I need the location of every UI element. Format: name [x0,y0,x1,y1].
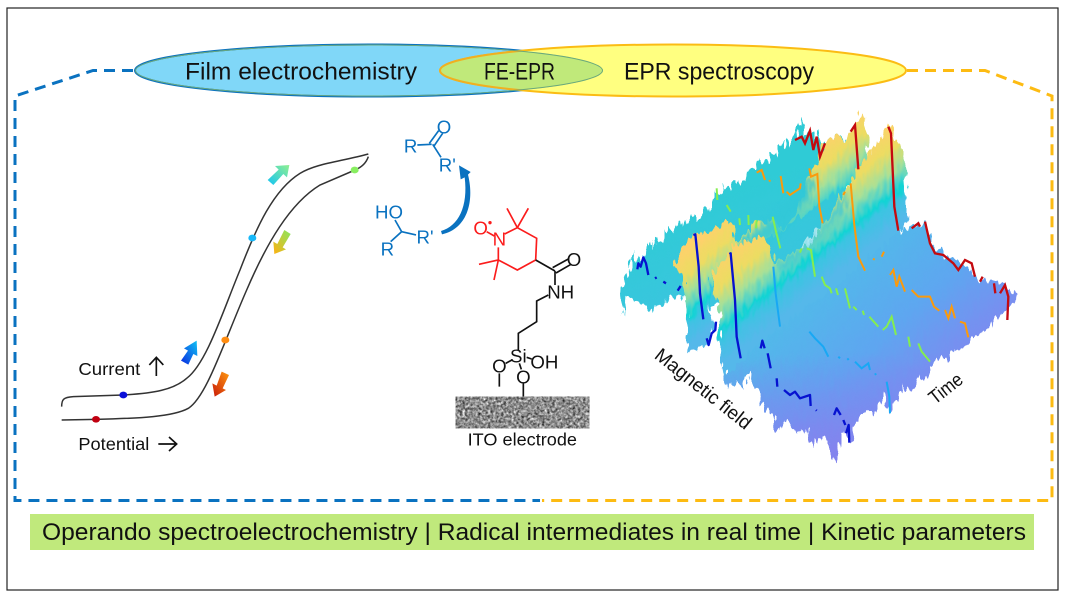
ellipse: film electrochemistry [135,44,603,96]
ketone product: R' [439,154,456,175]
alcohol substrate: R' [416,227,434,248]
trace: red [795,125,1008,320]
front wall teal section [775,193,848,270]
ridge wall: front [712,125,907,378]
TEMPO radical [473,208,537,280]
back plateau [622,120,857,315]
linker: Si [510,346,527,367]
icon: up arrow [149,357,163,376]
axis label: current: Current [78,359,141,379]
arrow: blue up [181,341,197,365]
TEMPO radical: N [493,229,506,250]
banner text: Operando spectroelectrochemistry | Radical intermediates in real time | Kinetic parameters [42,519,1026,546]
summary banner [30,514,1034,550]
curve: forward scan [62,154,368,407]
marker points [92,167,359,423]
axis label: magnetic field: Magnetic field [650,345,755,434]
label: ITO electrode: ITO electrode [468,429,577,449]
linker: OH [530,351,558,372]
arrow: cyan up [268,165,289,185]
venn diagram header [135,44,906,96]
voltammogram chart [62,154,368,454]
front surface shade [723,223,1018,463]
ridge wall: rear [673,113,868,353]
TEMPO radical: O [473,218,488,239]
arrow: orange down [212,372,229,397]
3D EPR surface plot [622,113,1018,463]
linker [492,249,581,397]
ketone product: R [404,136,417,157]
icon: right arrow [158,437,177,451]
linker: O [492,356,507,377]
linker: O [516,366,531,387]
rear wall teal section [738,177,815,260]
ketone product [404,116,456,175]
alcohol substrate: HO [375,201,403,222]
linker: NH [547,281,574,302]
reaction and molecular structure [375,116,589,449]
label: film electrochemistry: Film electrochemistry [185,58,417,86]
front flat surface [723,223,1018,463]
trace: cyan [773,267,890,413]
overlap edge [135,44,603,96]
ketone product: O [437,116,451,137]
arrow: oxidation [441,165,471,234]
dashed outline: film electrochemistry side [15,70,540,500]
axis label: time: Time [925,369,967,409]
arrow: green down [273,230,291,254]
trace: green [717,188,930,362]
curve: reverse scan [62,157,368,420]
overlap: FE-EPR [439,50,603,91]
ellipse: EPR spectroscopy [440,44,906,96]
linker: O [567,249,581,270]
trace: orange [757,168,968,337]
alcohol substrate [375,201,434,259]
trace: dark blue [637,234,849,443]
axis label: potential: Potential [78,434,149,454]
dashed outline: EPR spectroscopy side [542,70,1052,500]
alcohol substrate: R [381,238,394,259]
label: EPR spectroscopy: EPR spectroscopy [624,58,814,86]
ITO electrode surface [456,397,589,428]
label: FE-EPR: FE-EPR [484,58,555,86]
